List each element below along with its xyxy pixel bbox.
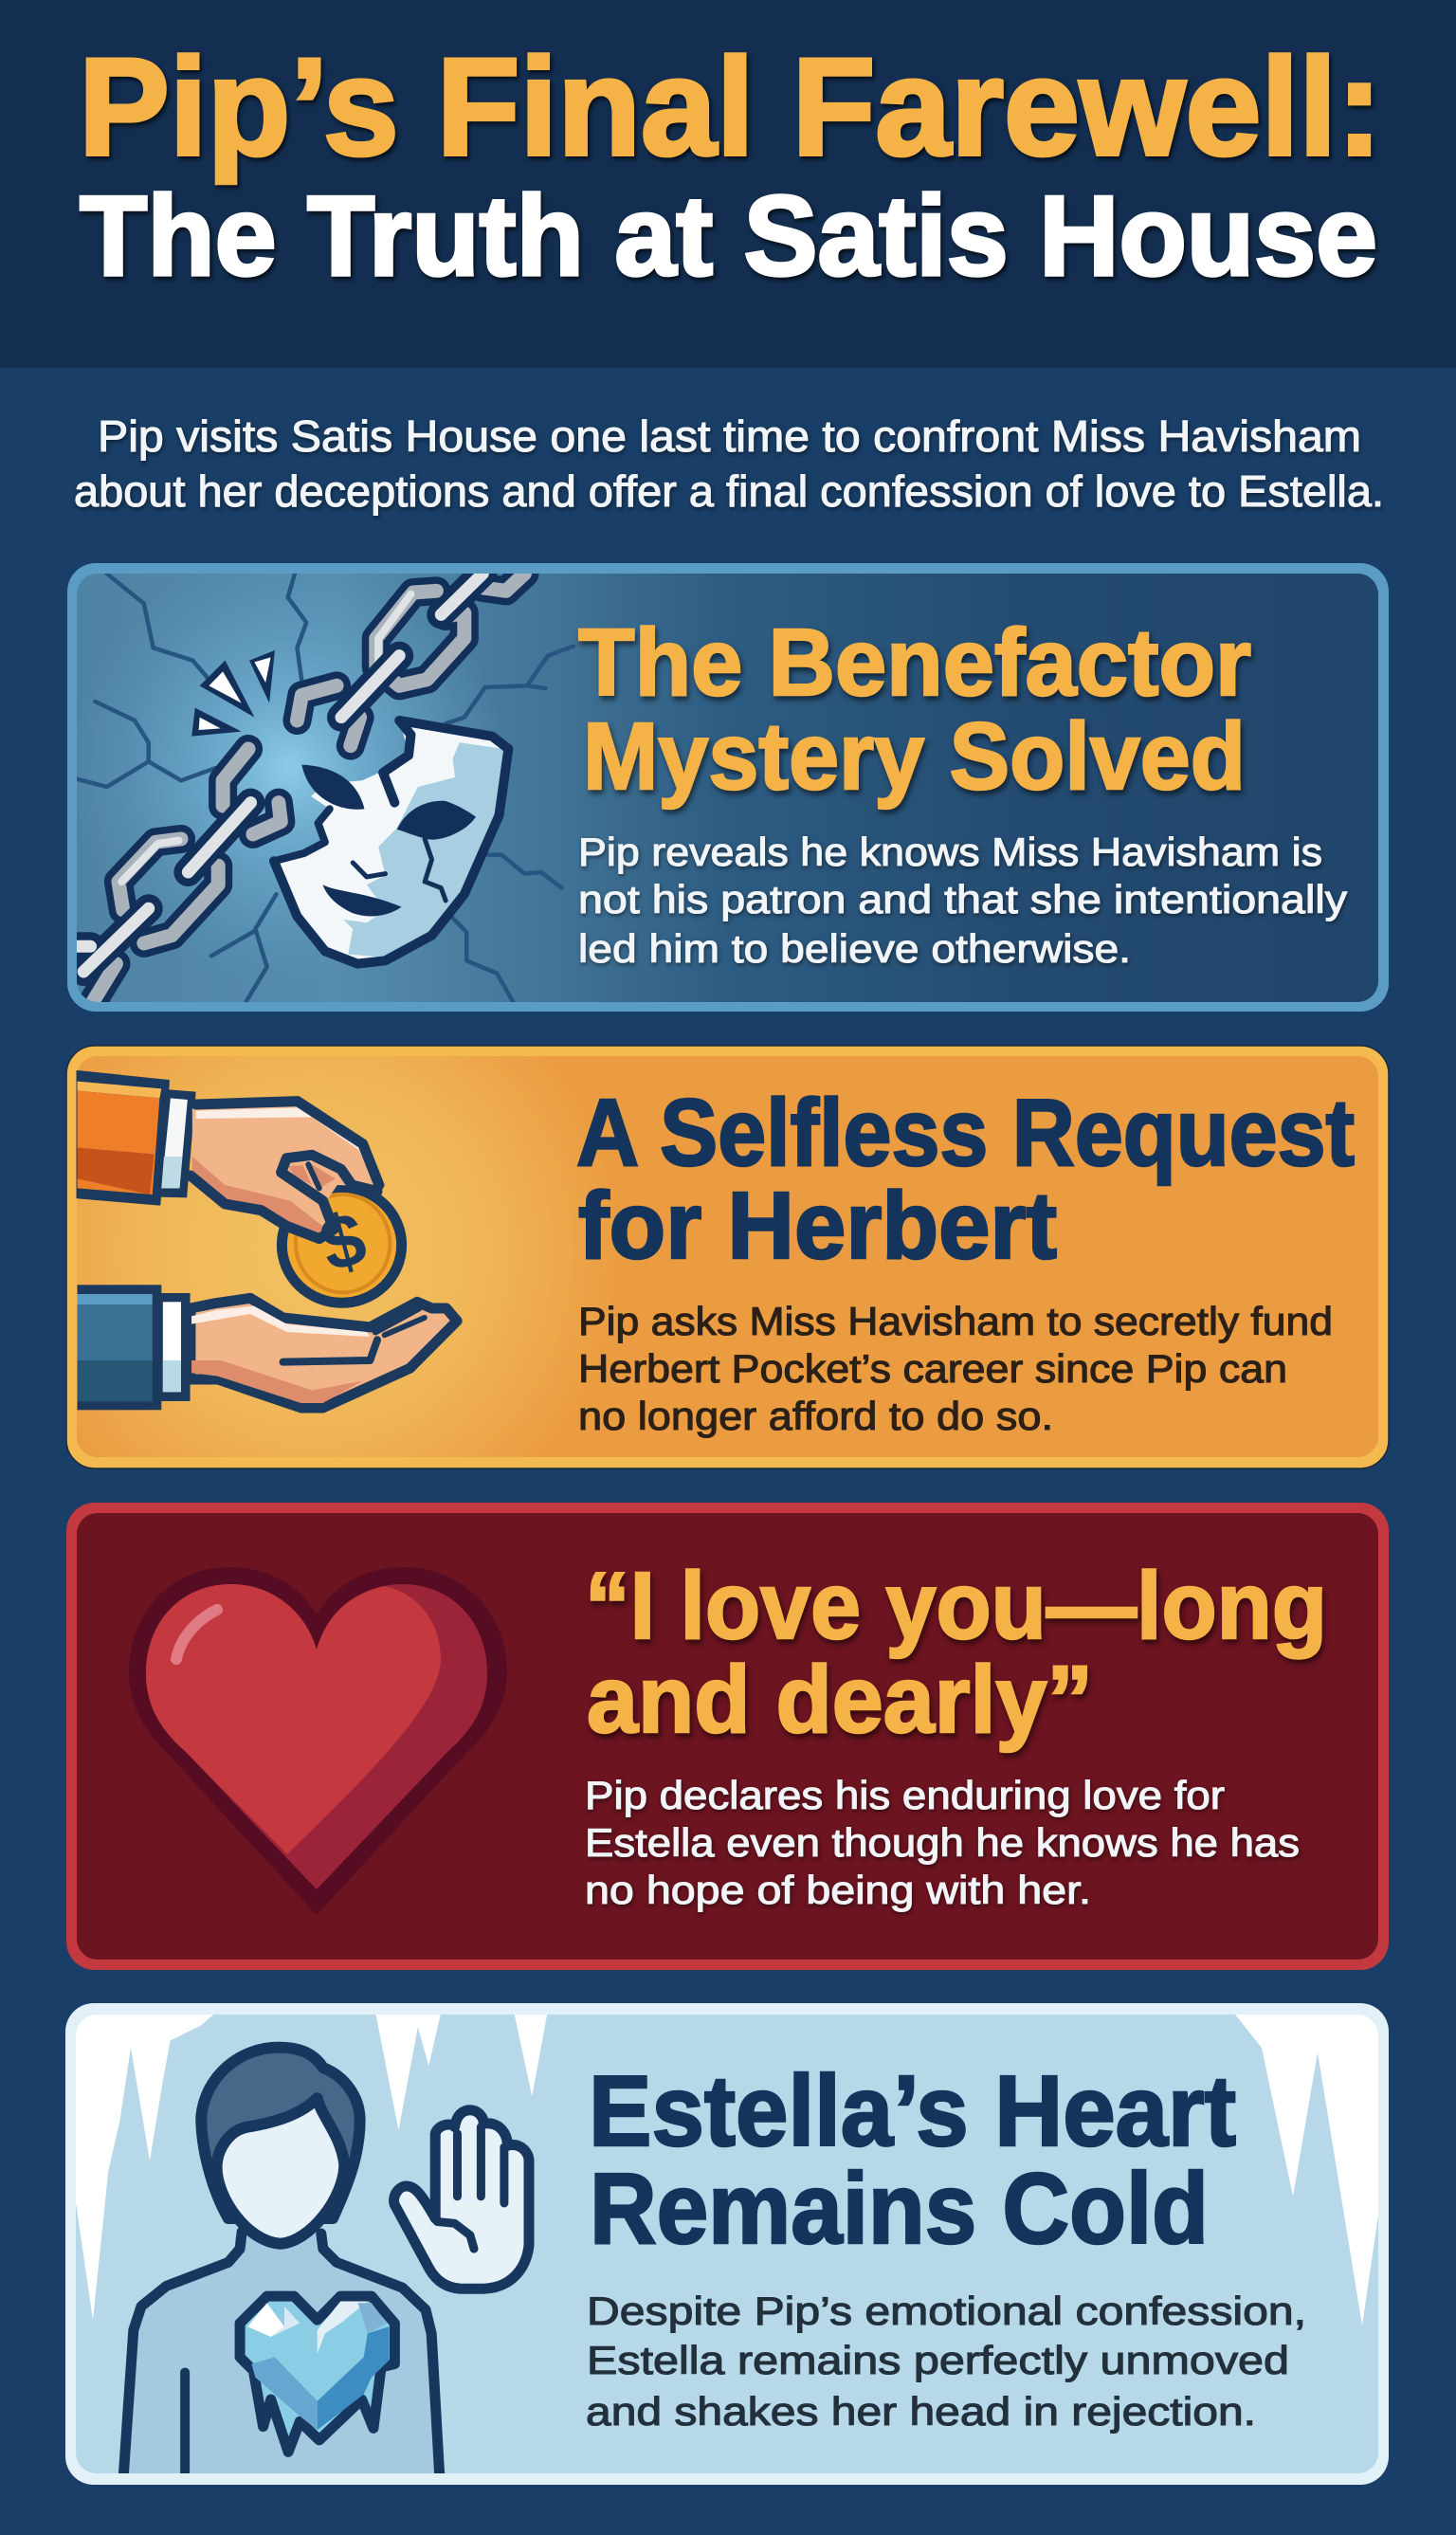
sub: coin	[282, 1187, 402, 1303]
heading: The Benefactor Mystery Solved: Mystery Solved	[583, 703, 1246, 810]
body text: Herbert Pocket’s career since Pip can	[578, 1346, 1287, 1391]
title: Pip’s Final Farewell:	[79, 29, 1382, 184]
sub: raised hand	[394, 2110, 529, 2289]
heading: Estella's Heart Remains Cold	[589, 2055, 1236, 2265]
panel: love confession	[66, 1503, 1389, 1970]
body text	[585, 1773, 1300, 1912]
header band	[0, 0, 1456, 368]
title	[79, 29, 1382, 300]
icicles	[74, 2012, 1384, 2325]
heading: I love you long and dearly	[585, 1553, 1327, 1753]
body text: no hope of being with her.	[585, 1868, 1091, 1912]
heading: A Selfless Request for Herbert: for Herbert	[578, 1173, 1057, 1279]
heading: A Selfless Request for Herbert: A Selfless Request	[576, 1080, 1355, 1186]
title: The Truth at Satis House	[80, 173, 1377, 300]
sub: chain links	[77, 574, 524, 1002]
intro text	[74, 411, 1384, 516]
body text: Pip declares his enduring love for	[585, 1773, 1225, 1817]
panel: Estella's cold heart	[65, 2003, 1389, 2485]
intro text: Pip visits Satis House one last time to confront Miss Havisham	[98, 411, 1361, 461]
icon: dollar sign: $	[312, 1195, 374, 1287]
sub: body	[123, 2232, 440, 2483]
body text	[578, 1299, 1333, 1438]
body text: Pip asks Miss Havisham to secretly fund	[578, 1299, 1333, 1343]
body text: Estella even though he knows he has	[585, 1820, 1300, 1865]
body text: not his patron and that she intentionally	[578, 877, 1347, 921]
heading: A Selfless Request for Herbert	[576, 1080, 1355, 1279]
heading: The Benefactor Mystery Solved	[578, 610, 1251, 810]
body text: Despite Pip’s emotional confession,	[587, 2289, 1306, 2333]
sub: lower sleeve	[78, 1285, 191, 1410]
body text: Pip reveals he knows Miss Havisham is	[578, 830, 1322, 874]
icon: person with frozen heart and raised hand	[123, 2048, 529, 2483]
sub: head	[201, 2048, 360, 2244]
intro text: about her deceptions and offer a final confession of love to Estella.	[74, 466, 1384, 516]
body text: no longer afford to do so.	[578, 1394, 1053, 1438]
body text: led him to believe otherwise.	[578, 926, 1131, 971]
sub: shards	[191, 650, 275, 737]
panel: benefactor mystery	[67, 563, 1389, 1012]
heading: The Benefactor Mystery Solved: The Benefactor	[578, 610, 1251, 716]
icon: broken chain and cracked mask	[77, 574, 573, 1002]
sub: upper hand	[191, 1102, 379, 1239]
heading: Estella's Heart Remains Cold: Estella’s Heart	[589, 2055, 1236, 2167]
sub: frozen heart	[240, 2296, 394, 2452]
icon: red heart	[129, 1567, 507, 1915]
sub: lower hand	[191, 1298, 457, 1408]
body text	[578, 830, 1347, 971]
icon: hands passing coin	[78, 1071, 457, 1410]
heading: Estella's Heart Remains Cold: Remains Cold	[590, 2153, 1209, 2265]
body text: and shakes her head in rejection.	[586, 2389, 1256, 2434]
sub: mask	[274, 720, 508, 964]
body text: Estella remains perfectly unmoved	[587, 2338, 1289, 2382]
sub: upper sleeve	[78, 1071, 196, 1205]
body text	[586, 2289, 1306, 2434]
heading: I love you long and dearly: and dearly”	[587, 1647, 1093, 1753]
panel: selfless request	[66, 1046, 1389, 1468]
heading: I love you long and dearly: “I love you—long	[585, 1553, 1327, 1659]
